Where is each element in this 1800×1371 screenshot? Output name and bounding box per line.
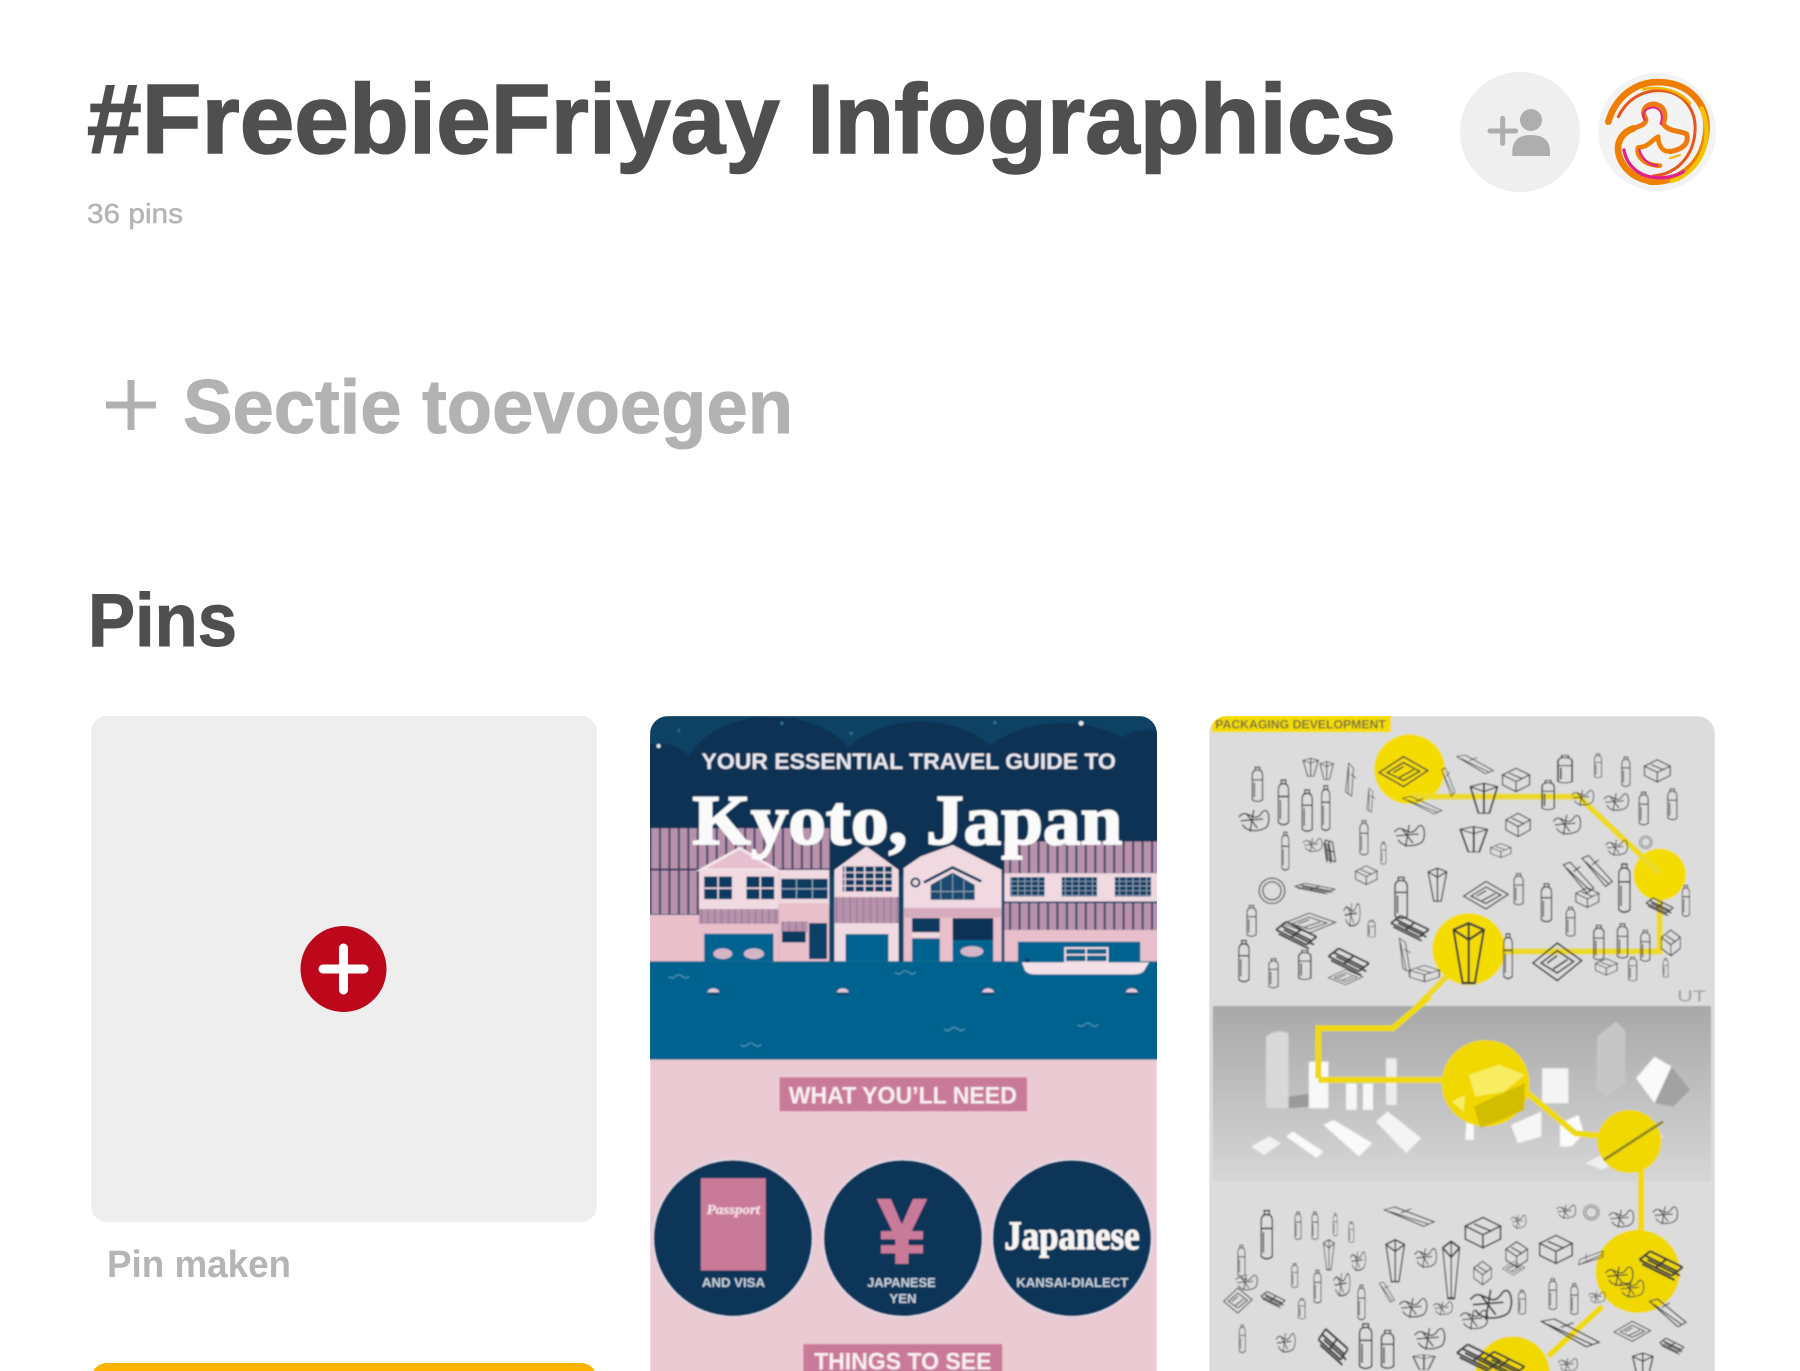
circle: passport: Passport [707, 1202, 761, 1217]
icon: profile avatar [1598, 73, 1716, 191]
product photo section [1213, 997, 1711, 1371]
circle: japanese [992, 1160, 1152, 1317]
panel: Kyoto travel guide pin [650, 716, 1157, 1371]
yellow path photo [1318, 997, 1680, 1371]
create pin label: Pin maken [107, 1244, 291, 1286]
house 3 [904, 845, 1002, 908]
pins heading: Pins [88, 578, 237, 662]
house 2 [834, 847, 899, 961]
circle: yen: JAPANESE [867, 1275, 936, 1290]
white packaging models [1251, 1022, 1690, 1170]
circle: passport [653, 1160, 813, 1317]
sketches top [1239, 754, 1689, 988]
what you'll need section [653, 1077, 1152, 1371]
logo mark: UT [1677, 988, 1707, 1005]
label: what you'll need: WHAT YOU’LL NEED [789, 1082, 1017, 1109]
house 1 [701, 848, 777, 870]
add section row: Sectie toevoegen [183, 365, 793, 450]
circle: yen: ¥ [878, 1180, 926, 1283]
circle: yen [823, 1160, 983, 1317]
water [649, 961, 1160, 1060]
boat [1065, 948, 1107, 962]
kyoto headline: Kyoto, Japan [692, 782, 1122, 860]
kyoto headline [692, 748, 1122, 860]
background stripes [649, 828, 830, 870]
icon: add collaborator button [1460, 72, 1580, 192]
circle: japanese: KANSAI-DIALECT [1016, 1275, 1129, 1290]
circle: yen: YEN [889, 1291, 916, 1306]
panel: create pin [91, 716, 597, 1222]
title: #FreebieFriyay Infographics [87, 64, 1396, 174]
panel: packaging development pin [1209, 716, 1715, 1371]
circle: passport: AND VISA [702, 1275, 765, 1290]
yellow path top [1373, 733, 1687, 1008]
middle annex [779, 870, 829, 906]
pin count: 36 pins [87, 198, 183, 229]
circle: japanese: Japanese [1004, 1213, 1140, 1258]
label: packaging development: PACKAGING DEVELOPMENT [1215, 718, 1387, 732]
sketch section bottom [1224, 1204, 1686, 1371]
panel: yellow pin [91, 1363, 597, 1371]
right block [1004, 873, 1160, 901]
sketch section top [1212, 716, 1707, 1030]
kyoto headline: YOUR ESSENTIAL TRAVEL GUIDE TO [702, 748, 1116, 774]
icon: red plus button [300, 926, 386, 1012]
kyoto header illustration [650, 716, 1157, 1061]
